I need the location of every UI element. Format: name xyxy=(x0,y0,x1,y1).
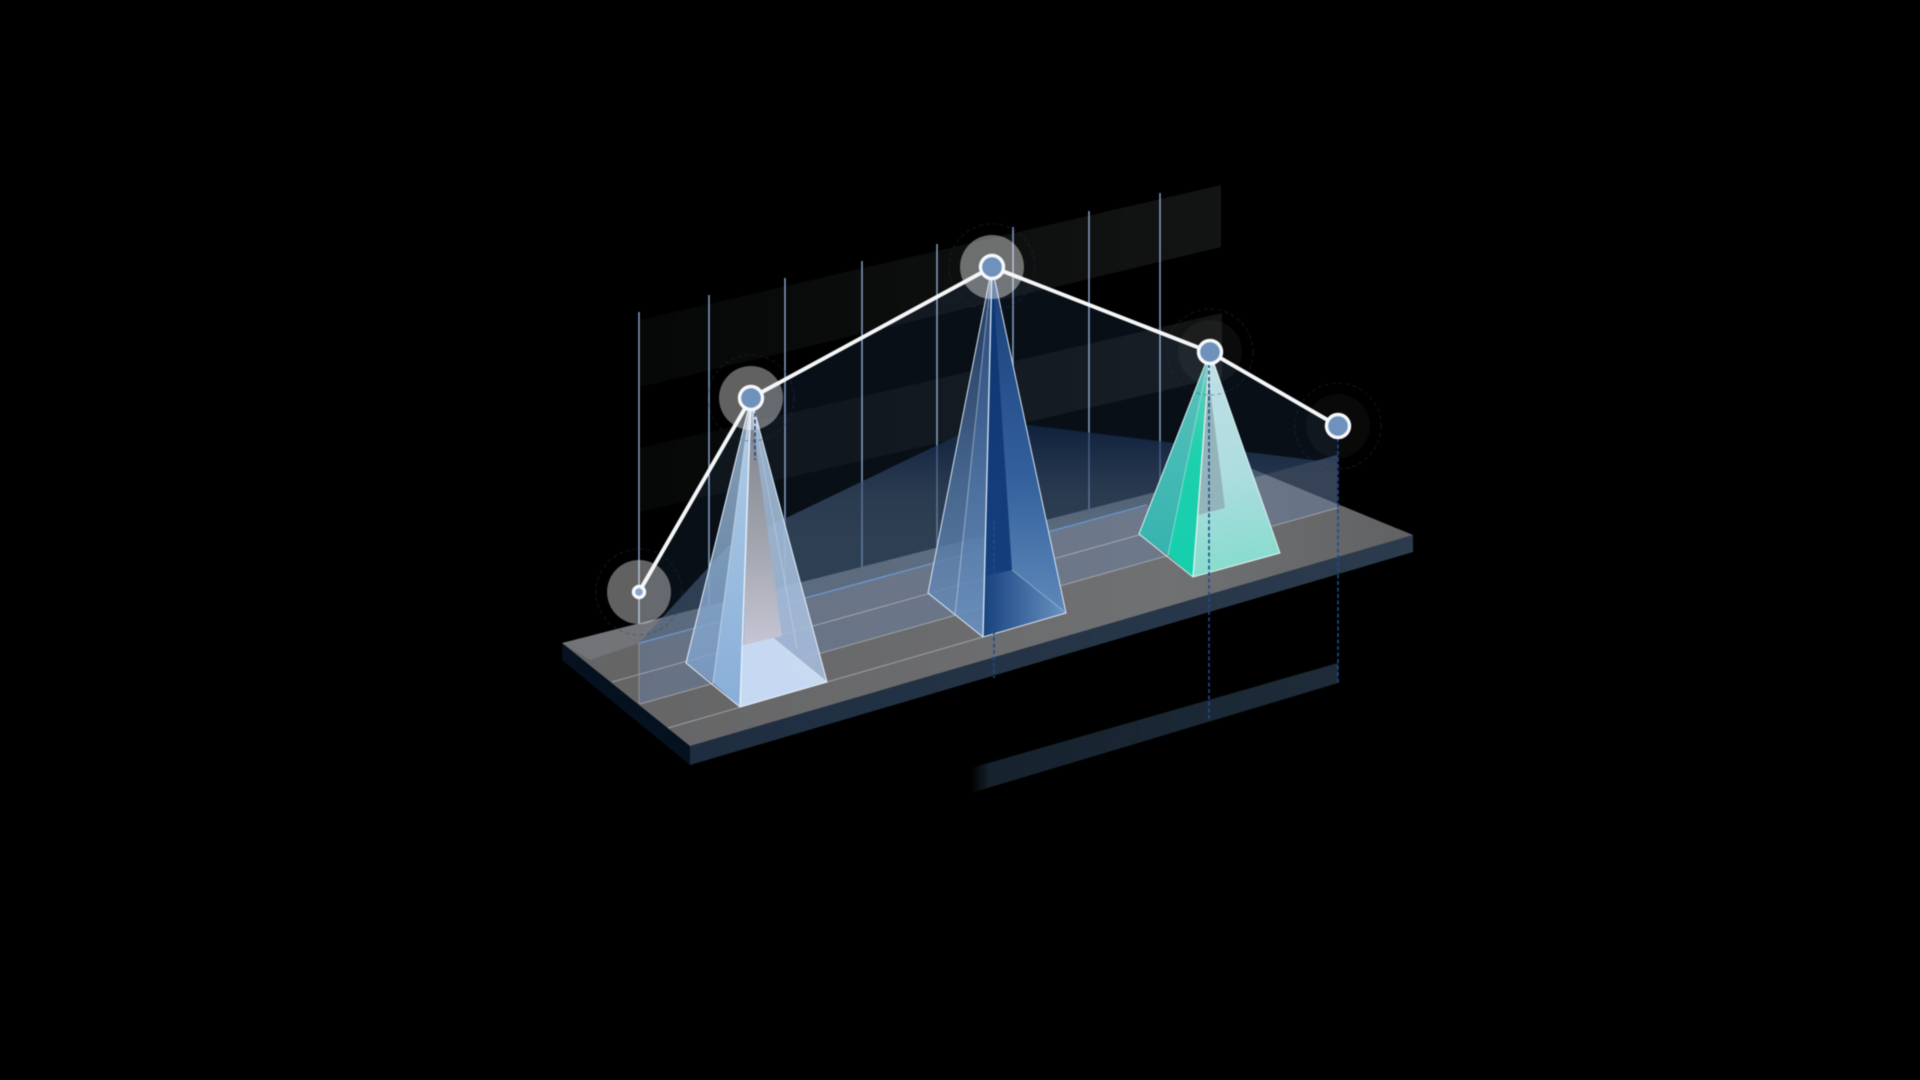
wall grid bands xyxy=(640,185,1222,512)
platform top xyxy=(562,468,1413,746)
trend line xyxy=(639,267,1338,592)
platform front side xyxy=(690,535,1413,765)
pyramid 2: deep blue xyxy=(928,267,1066,637)
pyramid 3: teal xyxy=(1139,352,1280,577)
wall vertical grid lines xyxy=(639,193,1160,643)
data point markers xyxy=(634,256,1350,598)
platform back lightening xyxy=(562,455,1338,660)
platform left side xyxy=(562,643,690,765)
area under line chart xyxy=(639,267,1338,643)
floor grid lines xyxy=(612,508,1337,728)
platform xyxy=(562,468,1413,765)
wall area chart xyxy=(639,425,1338,643)
marker halos xyxy=(607,235,1370,624)
dashed drop lines xyxy=(755,364,1338,720)
wall baseline xyxy=(640,505,1147,643)
detached lower bar xyxy=(971,663,1338,793)
floor overlay xyxy=(639,455,1337,704)
pyramid 1: light blue xyxy=(686,398,827,707)
dashed halo rings xyxy=(596,224,1381,635)
